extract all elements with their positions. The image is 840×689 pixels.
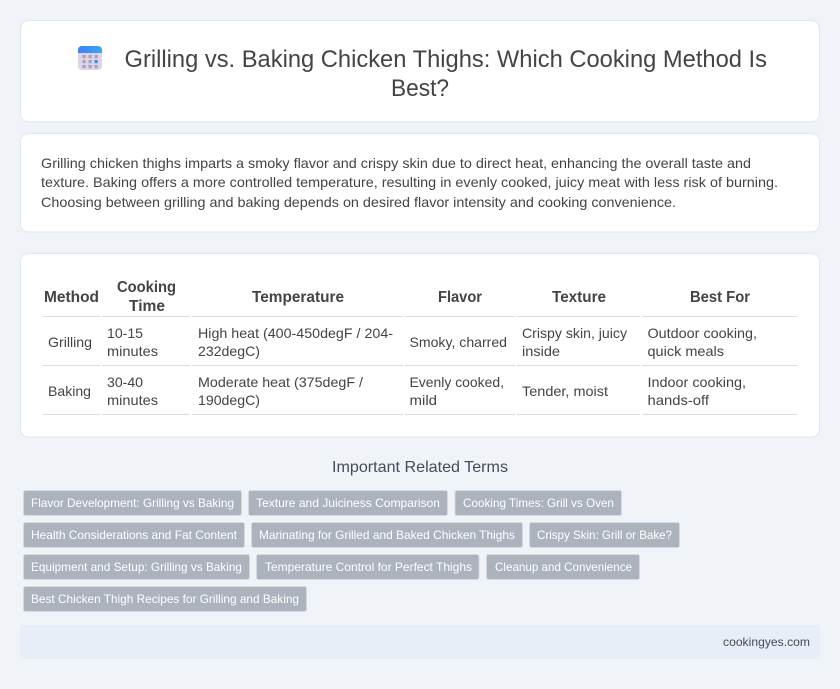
tag: cleanup: Cleanup and Convenience — [495, 560, 632, 574]
title: Grilling vs. Baking Chicken Thighs: Which Cooking Method Is — [124, 46, 767, 73]
table header: Texture — [552, 289, 606, 306]
table header: Temperature — [252, 289, 344, 306]
tag: flavor development: Flavor Development: Grilling vs Baking — [31, 496, 234, 510]
footer: cookingyes.com — [723, 635, 810, 649]
title — [124, 46, 767, 102]
tag: crispy skin — [530, 522, 680, 548]
panel: intro text: Choosing between grilling and baking depends on desired flavor intensity and cooking convenience. — [41, 194, 676, 210]
table row: grilling: quick meals — [648, 343, 724, 359]
table row: baking: hands-off — [648, 392, 709, 408]
table row: baking: 190degC) — [198, 392, 260, 408]
table header: Cooking — [117, 279, 176, 296]
icon: calendar — [78, 46, 102, 70]
table header: Best For — [690, 289, 750, 306]
tag: crispy skin: Crispy Skin: Grill or Bake? — [537, 528, 672, 542]
table row: grilling: Grilling — [48, 334, 92, 350]
table row: baking: Indoor cooking, — [648, 374, 746, 390]
panel: intro text — [20, 134, 820, 232]
title: Best? — [391, 75, 449, 102]
panel: intro text: Grilling chicken thighs imparts a smoky flavor and crispy skin due to direct heat, enhancing the overall taste and — [41, 155, 751, 171]
panel: intro text: texture. Baking offers a more controlled temperature, resulting in evenly cooked, juicy meat with less risk of burning. — [41, 174, 778, 190]
table header: Time — [129, 298, 165, 315]
tag: cooking times — [455, 490, 622, 516]
table row: grilling: minutes — [107, 343, 158, 359]
tag: texture and juiciness — [248, 490, 448, 516]
tag: texture and juiciness: Texture and Juiciness Comparison — [256, 496, 440, 510]
footer — [20, 625, 820, 659]
table row: baking: mild — [410, 392, 437, 408]
table row: grilling: 232degC) — [198, 343, 260, 359]
tag: marinating — [252, 522, 522, 548]
table row: grilling: Smoky, charred — [410, 334, 507, 350]
tag: cleanup — [486, 554, 640, 580]
table row: grilling: 10-15 — [107, 325, 143, 341]
table row: baking — [48, 374, 746, 408]
table row: grilling: High heat (400-450degF / 204- — [198, 325, 393, 341]
heading: important related terms: Important Related Terms — [332, 459, 508, 476]
table row: grilling — [48, 325, 757, 359]
table row: baking: 30-40 — [107, 374, 143, 390]
tag: cooking times: Cooking Times: Grill vs Oven — [463, 496, 614, 510]
tag: temperature control — [256, 554, 479, 580]
tag: flavor development — [24, 490, 242, 516]
table row: baking: minutes — [107, 392, 158, 408]
table row: grilling: inside — [522, 343, 560, 359]
table row: baking: Baking — [48, 383, 91, 399]
table header: Flavor — [438, 289, 482, 306]
tag: equipment and setup: Equipment and Setup: Grilling vs Baking — [31, 560, 242, 574]
table header — [44, 279, 750, 315]
table header: Method — [44, 289, 99, 306]
tag: health considerations: Health Considerations and Fat Content — [31, 528, 238, 542]
tag: best recipes — [24, 586, 306, 612]
tag: temperature control: Temperature Control for Perfect Thighs — [265, 560, 472, 574]
table row: grilling: Outdoor cooking, — [648, 325, 757, 341]
panel: comparison table — [20, 254, 820, 437]
table row: baking: Evenly cooked, — [410, 374, 504, 390]
tag: equipment and setup — [24, 554, 250, 580]
table row: baking: Moderate heat (375degF / — [198, 374, 363, 390]
panel: header — [20, 20, 820, 122]
tag: best recipes: Best Chicken Thigh Recipes for Grilling and Baking — [31, 592, 299, 606]
related term tags — [24, 490, 680, 612]
table row: grilling: Crispy skin, juicy — [522, 325, 627, 341]
table row: baking: Tender, moist — [522, 383, 608, 399]
tag: marinating: Marinating for Grilled and Baked Chicken Thighs — [259, 528, 515, 542]
tag: health considerations — [24, 522, 244, 548]
